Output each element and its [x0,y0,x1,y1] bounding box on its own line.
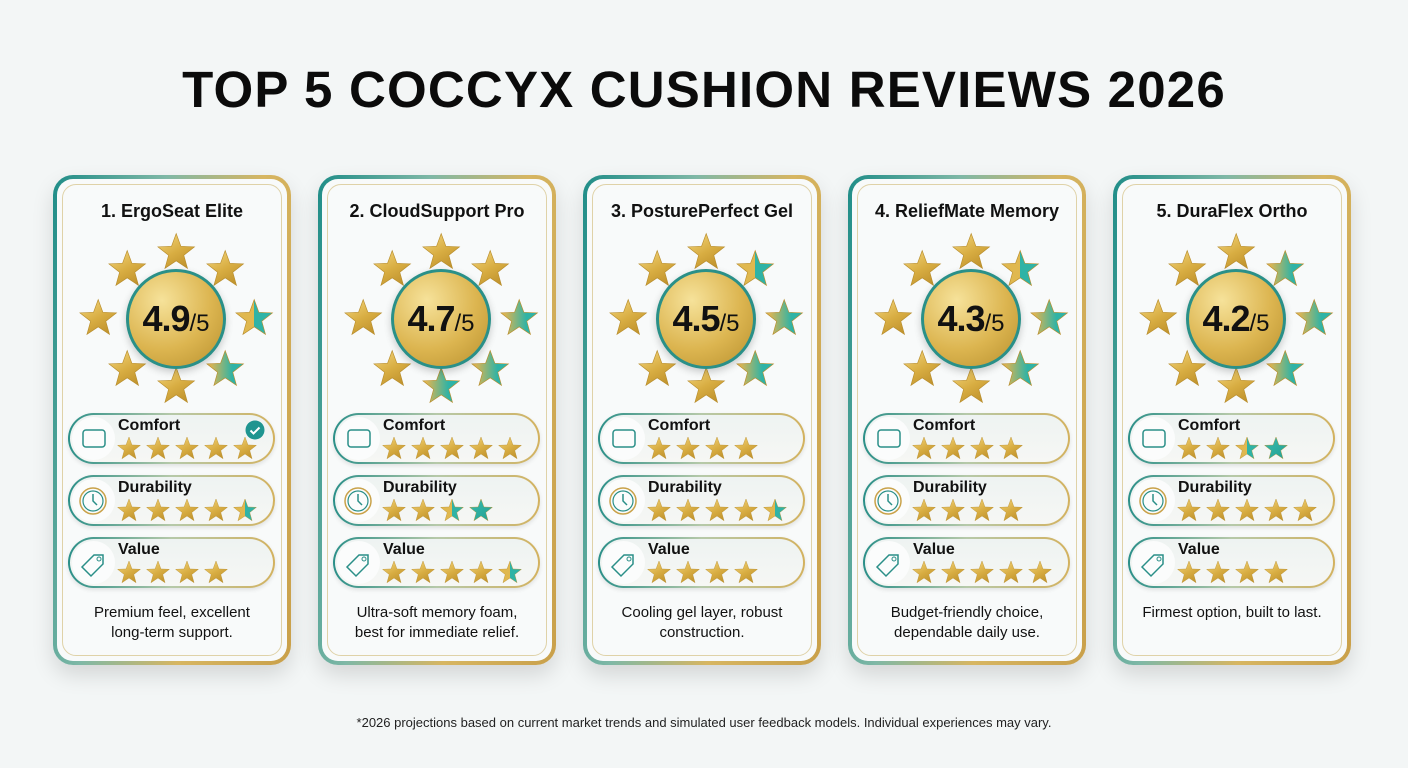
star ring [79,232,274,404]
row: comfort: Comfort [383,417,445,434]
title: TOP 5 COCCYX CUSHION REVIEWS 2026 [182,61,1226,118]
row: durability: Durability [118,479,192,496]
description: construction. [659,624,745,641]
score badge [921,269,1021,369]
description: Firmest option, built to last. [1142,604,1322,621]
row: durability: Durability [913,479,987,496]
star ring [1139,232,1334,404]
row: durability [1128,475,1335,526]
row: durability [863,475,1070,526]
footnote: *2026 projections based on current market trends and simulated user feedback models. Individual experiences may vary. [357,715,1051,730]
row: durability [333,475,540,526]
row: comfort: Comfort [118,417,180,434]
row: comfort [333,413,540,464]
row: value: Value [383,541,425,558]
row: comfort [598,413,805,464]
score badge [656,269,756,369]
star ring [874,232,1068,404]
row: value [68,537,275,588]
description: long-term support. [111,624,233,641]
card name: 3. PosturePerfect Gel [611,201,793,221]
score badge: 4.3/5 [937,298,1005,339]
description [891,604,1043,641]
card name: 2. CloudSupport Pro [350,201,524,221]
row: comfort: Comfort [1178,417,1240,434]
row: comfort: Comfort [648,417,710,434]
card name: 4. ReliefMate Memory [875,201,1059,221]
row: comfort [863,413,1070,464]
star ring [609,232,804,404]
description [355,604,519,641]
panel: card 1 [53,175,291,665]
score badge: 4.9/5 [142,298,210,339]
row: comfort [1128,413,1335,464]
score badge: 4.2/5 [1202,298,1270,339]
panel: card 4 [848,175,1086,665]
row: value: Value [1178,541,1220,558]
description: Ultra-soft memory foam, [357,604,517,621]
description: Premium feel, excellent [94,604,250,621]
row: durability: Durability [648,479,722,496]
star ring [344,232,538,404]
score badge [391,269,491,369]
description: dependable daily use. [894,624,1040,641]
row: value: Value [118,541,160,558]
row: comfort [68,413,275,464]
description: Budget-friendly choice, [891,604,1043,621]
card name: 5. DuraFlex Ortho [1156,201,1308,221]
score badge: 4.5/5 [672,298,740,339]
description: best for immediate relief. [355,624,519,641]
panel: card 5 [1113,175,1351,665]
row: durability: Durability [383,479,457,496]
panel: card 2 [318,175,556,665]
description [622,604,782,641]
row: durability [68,475,275,526]
panel: card 3 [583,175,821,665]
score badge [126,269,226,369]
description: Cooling gel layer, robust [622,604,782,621]
row: value [333,537,540,588]
row: comfort: Comfort [913,417,975,434]
row: durability: Durability [1178,479,1252,496]
row: value: Value [648,541,690,558]
description [94,604,250,641]
card name: 1. ErgoSeat Elite [101,201,243,221]
score badge: 4.7/5 [407,298,475,339]
row: value [863,537,1070,588]
row: value [598,537,805,588]
score badge [1186,269,1286,369]
row: value [1128,537,1335,588]
row: durability [598,475,805,526]
row: value: Value [913,541,955,558]
